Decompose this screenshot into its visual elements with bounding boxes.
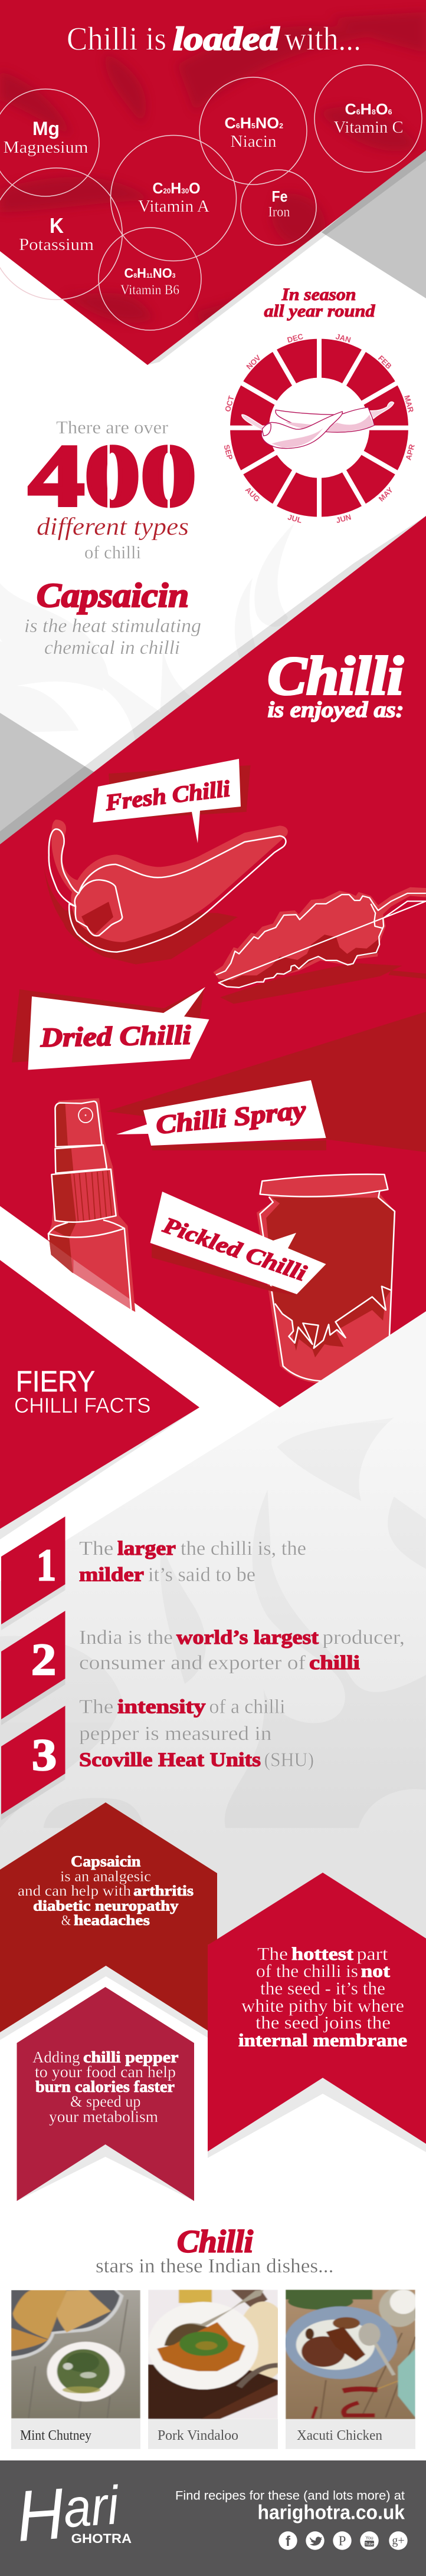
- season wheel: [222, 332, 417, 525]
- title: loaded: [173, 21, 280, 58]
- hottest part text: internal membrane: [238, 2030, 407, 2051]
- fact 2 text: India is the: [79, 1627, 173, 1649]
- icon: pinterest: [333, 2531, 352, 2550]
- nutrient: magnesium: Mg: [32, 118, 60, 139]
- burn calories text: Adding: [32, 2048, 80, 2066]
- pickle jar illustration: [257, 1175, 395, 1384]
- texture: chilli photo streaks: [0, 12, 426, 343]
- fact 3 text: (SHU): [264, 1749, 314, 1771]
- website call to action: [175, 2489, 405, 2524]
- heading: fiery: FIERY: [16, 1365, 95, 1398]
- chilli outline: [49, 829, 286, 952]
- nutrient: niacin: Niacin: [230, 133, 276, 151]
- burn calories text: chilli pepper: [83, 2048, 179, 2066]
- hottest part text: [238, 1943, 407, 2051]
- dried chilli outline: [216, 893, 426, 988]
- capsaicin text: Capsaicin: [71, 1853, 141, 1870]
- burn calories text: to your food can help: [35, 2063, 176, 2081]
- heading: chilli is enjoyed as: Chilli: [268, 646, 404, 706]
- nutrient: vitamin A: [138, 179, 210, 216]
- fact 1 text: The: [79, 1538, 113, 1560]
- grey facts background: [0, 1311, 426, 1946]
- hottest part text: hottest: [291, 1943, 354, 1964]
- capsaicin text: headaches: [74, 1913, 150, 1929]
- month labels: JUL: [287, 512, 303, 525]
- icon: youtube: [360, 2531, 379, 2550]
- bottle outline: [48, 1101, 131, 1310]
- burn calories text: your metabolism: [49, 2108, 158, 2126]
- panel: chilli is loaded with: [0, 0, 426, 365]
- nutrient: vitamin C: [334, 100, 404, 137]
- fact 1 text: [79, 1538, 306, 1585]
- capsaicin text: diabetic neuropathy: [33, 1899, 179, 1914]
- nutrient: iron: Iron: [268, 205, 290, 220]
- icon: google plus: [389, 2531, 408, 2550]
- nutrient: vitamin B6: [120, 265, 179, 297]
- capsaicin text: &: [61, 1913, 71, 1929]
- photo: xacuti chicken: [284, 2288, 420, 2419]
- fact 2 text: producer,: [322, 1627, 405, 1649]
- fact 1: [1, 1516, 306, 1630]
- month labels: OCT: [223, 395, 236, 413]
- capsaicin definition: Capsaicin: [37, 576, 189, 614]
- nutrient: niacin: C6H5NO2: [224, 114, 283, 132]
- card: pork vindaloo: [148, 2289, 289, 2449]
- fresh chilli illustration: [42, 820, 288, 965]
- heading: in season: In season: [281, 285, 356, 304]
- caption: Xacuti Chicken: [297, 2428, 382, 2443]
- fact 2 text: consumer and exporter of: [79, 1652, 306, 1674]
- fact 3 text: of a chilli: [209, 1696, 286, 1718]
- capsaicin text: is an analgesic: [60, 1869, 151, 1885]
- big number 400: 400: [28, 427, 196, 525]
- background flames lower: [0, 1417, 426, 1828]
- icon: youtube: Tube: [365, 2542, 374, 2547]
- burn calories text: burn calories faster: [35, 2078, 175, 2095]
- icon: twitter: [306, 2531, 325, 2550]
- background flames upper: [0, 522, 295, 743]
- fact 1: 1: [37, 1541, 56, 1590]
- fact 1 text: the chilli is, the: [181, 1538, 306, 1560]
- nutrient: potassium: K: [50, 213, 64, 238]
- heading: chilli stars in these dishes: stars in these Indian dishes...: [96, 2255, 333, 2277]
- fact 3: 3: [32, 1731, 57, 1780]
- month labels: JUN: [335, 512, 352, 525]
- panel: fiery chilli facts: [0, 1260, 199, 1539]
- nutrient: niacin: [224, 114, 283, 151]
- diagonal shadow bands: [0, 150, 426, 844]
- heading: chilli stars in these dishes: [96, 2223, 333, 2277]
- nutrient: vitamin A: C20H30O: [152, 179, 201, 197]
- month labels: DEC: [286, 332, 304, 344]
- heading: chilli is enjoyed as: is enjoyed as:: [268, 698, 404, 722]
- spray bottle illustration: [48, 1098, 135, 1312]
- logo: hari ghotra: H: [14, 2473, 67, 2557]
- panel: capsaicin analgesic: [0, 1802, 217, 2040]
- icon: youtube: You: [365, 2535, 373, 2541]
- card: xacuti chicken: [284, 2288, 420, 2449]
- cap ribs: [74, 1171, 112, 1221]
- nutrient: iron: [268, 187, 290, 220]
- fact 1 text: larger: [117, 1538, 176, 1560]
- hottest part text: not: [361, 1960, 391, 1981]
- fact 2 text: [79, 1627, 405, 1674]
- caption: Mint Chutney: [20, 2428, 91, 2443]
- fact 2 text: world’s largest: [176, 1627, 319, 1649]
- nutrient: magnesium: Magnesium: [4, 139, 89, 157]
- capsaicin definition: is the heat stimulating: [24, 616, 201, 637]
- icon: google plus: g+: [392, 2534, 405, 2547]
- hottest part text: The: [257, 1943, 288, 1964]
- heading: chilli stars in these dishes: Chilli: [177, 2223, 253, 2259]
- stat: 400 types: different types: [37, 514, 189, 541]
- fact 2: 2: [31, 1635, 56, 1685]
- capsaicin definition: [24, 576, 201, 659]
- month labels: FEB: [376, 354, 394, 371]
- month labels: MAY: [377, 485, 395, 503]
- grey triangle top right: [322, 146, 426, 298]
- heading: in season: [264, 285, 376, 321]
- jar outline: [260, 1175, 395, 1381]
- nutrient circles: [0, 65, 422, 330]
- capsaicin text: [18, 1853, 194, 1929]
- month labels: NOV: [244, 353, 263, 371]
- capsaicin text: arthritis: [133, 1883, 194, 1899]
- footer: [0, 2460, 426, 2576]
- fact 3 text: The: [79, 1696, 113, 1718]
- dried chilli illustration: [213, 887, 426, 1004]
- callout: fresh chilli: Fresh Chilli: [103, 776, 231, 816]
- nutrient: vitamin C: Vitamin C: [334, 119, 404, 137]
- month labels: AUG: [244, 485, 262, 504]
- title: [67, 21, 361, 58]
- fact 1 text: milder: [79, 1564, 144, 1585]
- hottest part text: the seed - it’s the: [260, 1978, 385, 1999]
- capsaicin definition: chemical in chilli: [44, 637, 180, 659]
- burn calories text: [32, 2048, 179, 2126]
- month labels: JAN: [335, 332, 352, 344]
- nutrient: magnesium: [4, 118, 89, 157]
- website call to action: Find recipes for these (and lots more) at: [175, 2489, 405, 2502]
- icon: facebook: f: [286, 2534, 291, 2549]
- nutrient: potassium: [19, 213, 94, 254]
- callout: chilli spray: Chilli Spray: [155, 1095, 307, 1140]
- fact 3 text: Scoville Heat Units: [79, 1749, 261, 1771]
- website call to action: harighotra.co.uk: [257, 2502, 405, 2524]
- logo: hari ghotra: ari: [61, 2475, 122, 2539]
- logo: hari ghotra: GHOTRA: [71, 2531, 132, 2546]
- month labels: MAR: [402, 394, 415, 414]
- fact 2: [1, 1611, 405, 1725]
- stat: 400 types: There are over: [56, 417, 169, 437]
- card: mint chutney: [11, 2290, 140, 2449]
- icon: facebook: [278, 2531, 297, 2550]
- nutrient: vitamin A: Vitamin A: [138, 198, 210, 216]
- callout: dried chilli: Dried Chilli: [40, 1020, 191, 1052]
- hottest part text: the seed joins the: [255, 2012, 391, 2033]
- fact 3 text: [79, 1696, 314, 1771]
- panel: burn calories: [17, 1987, 194, 2201]
- nutrient: potassium: Potassium: [19, 236, 94, 254]
- photo: pork vindaloo: [148, 2289, 289, 2419]
- hottest part text: white pithy bit where: [241, 1995, 404, 2016]
- fact 3 text: intensity: [117, 1696, 205, 1718]
- icon: pinterest: P: [339, 2534, 346, 2548]
- heading: in season: all year round: [264, 301, 376, 321]
- panel: hottest part: [208, 1873, 426, 2158]
- callout: chilli spray: [116, 1080, 326, 1150]
- logo: hari ghotra: [14, 2469, 132, 2557]
- fact 3 text: pepper is measured in: [79, 1723, 271, 1745]
- nutrient: vitamin B6: C8H11NO3: [124, 265, 176, 281]
- fact 2 text: chilli: [309, 1652, 360, 1674]
- stat: 400 types: of chilli: [84, 542, 141, 562]
- callout: dried chilli: [12, 987, 209, 1070]
- callout: pickled chilli: Pickled Chilli: [159, 1212, 310, 1286]
- month labels: APR: [404, 443, 417, 461]
- stat: 400 types: [28, 417, 196, 562]
- hottest part text: part: [356, 1943, 388, 1964]
- nutrient: iron: Fe: [271, 187, 288, 205]
- social icons: [278, 2531, 408, 2550]
- photo: mint chutney: [11, 2290, 140, 2419]
- title: with...: [284, 21, 361, 58]
- month labels: [222, 332, 417, 525]
- nutrient: vitamin B6: Vitamin B6: [120, 282, 179, 297]
- burn calories text: & speed up: [70, 2093, 140, 2110]
- callout: fresh chilli: [93, 759, 250, 843]
- caption: Pork Vindaloo: [158, 2428, 238, 2443]
- hottest part text: of the chilli is: [256, 1960, 358, 1981]
- capsaicin text: and can help with: [18, 1883, 132, 1899]
- icon: crossed chillies: [242, 402, 394, 449]
- heading: chilli facts: CHILLI FACTS: [14, 1393, 151, 1417]
- month labels: SEP: [222, 443, 235, 461]
- callout: pickled chilli: [150, 1192, 326, 1295]
- nutrient: vitamin C: C6H8O6: [345, 100, 392, 118]
- fact 3: [1, 1696, 314, 1820]
- title: Chilli is: [67, 21, 166, 58]
- grey triangle mid left: [0, 713, 118, 855]
- panel: chilli is enjoyed as: [0, 516, 426, 1407]
- fact 1 text: it’s said to be: [148, 1564, 255, 1585]
